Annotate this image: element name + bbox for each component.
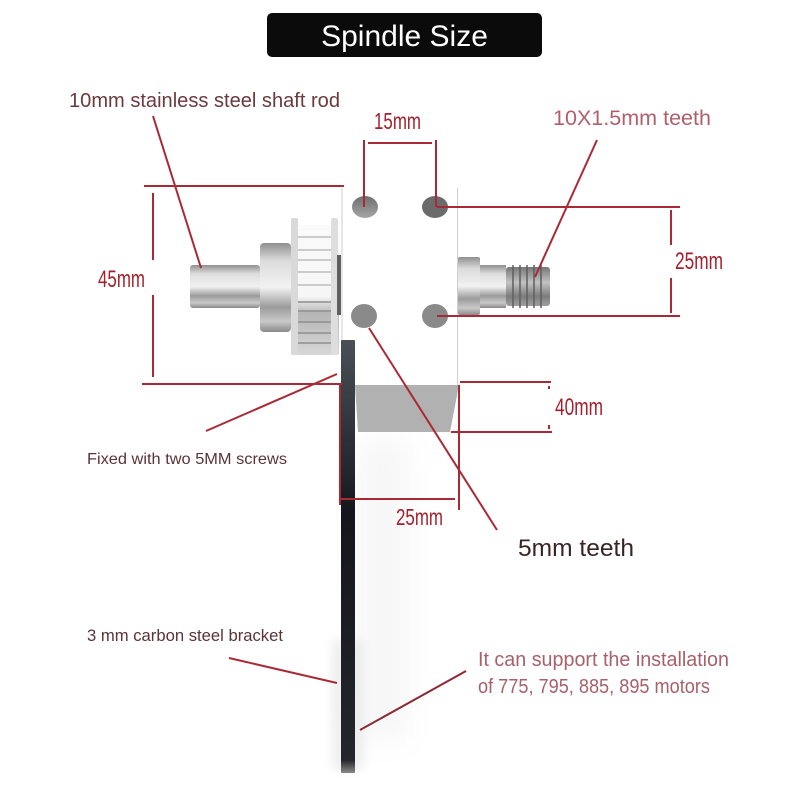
dimension: 25mm vertical xyxy=(437,207,680,316)
leader: shaft rod xyxy=(153,116,201,268)
pulley body xyxy=(291,225,339,355)
dimension: 40mm xyxy=(451,382,552,432)
label: motor support xyxy=(478,649,729,698)
label: motor support: of 775, 795, 885, 895 motors xyxy=(478,676,710,698)
leader: carbon steel bracket xyxy=(229,658,337,683)
bearing xyxy=(260,243,291,332)
title xyxy=(267,13,542,57)
label: 45mm: 45mm xyxy=(98,266,145,293)
pulley dark collar xyxy=(337,255,341,315)
threaded bolt xyxy=(458,257,550,315)
leader: motors xyxy=(360,671,466,730)
label: 25mm bottom: 25mm xyxy=(396,504,443,530)
carbon steel bracket xyxy=(341,340,355,773)
dimension lines xyxy=(142,116,680,730)
dimension: 15mm xyxy=(364,140,436,207)
label: Fixed with two 5MM screws: Fixed with two 5MM screws xyxy=(87,451,287,468)
hole top right xyxy=(422,196,448,218)
label: motor support: It can support the installation xyxy=(478,649,729,671)
hole top left xyxy=(352,196,378,218)
dimension: 45mm xyxy=(142,186,344,384)
block underside xyxy=(355,385,459,432)
leader: 10X1.5mm teeth xyxy=(535,140,597,277)
leader: 5mm teeth xyxy=(369,328,497,530)
pulley teeth xyxy=(298,237,331,285)
label: 10X1.5mm teeth: 10X1.5mm teeth xyxy=(553,107,711,130)
dimension: 25mm horizontal xyxy=(340,384,459,510)
shaft xyxy=(190,265,260,308)
pulley flange left xyxy=(291,218,298,355)
pulley and shaft xyxy=(190,218,341,355)
mounting block xyxy=(342,188,459,432)
pulley flange right xyxy=(331,218,338,355)
thread xyxy=(506,267,550,306)
hole bottom left xyxy=(351,304,377,328)
label: 15mm: 15mm xyxy=(374,108,421,134)
label: 25mm right: 25mm xyxy=(675,248,723,275)
label: 5mm teeth: 5mm teeth xyxy=(518,535,634,562)
soft shadow behind bracket xyxy=(332,440,408,770)
label: 10mm stainless steel shaft rod: 10mm stainless steel shaft rod xyxy=(69,90,340,112)
neck xyxy=(480,265,506,308)
label: 3 mm carbon steel bracket: 3 mm carbon steel bracket xyxy=(87,627,283,645)
title: Spindle Size xyxy=(321,20,488,53)
nut xyxy=(458,257,480,315)
hole bottom right xyxy=(422,304,448,328)
label: 40mm: 40mm xyxy=(555,394,603,421)
leader: two 5MM screws xyxy=(206,374,337,431)
